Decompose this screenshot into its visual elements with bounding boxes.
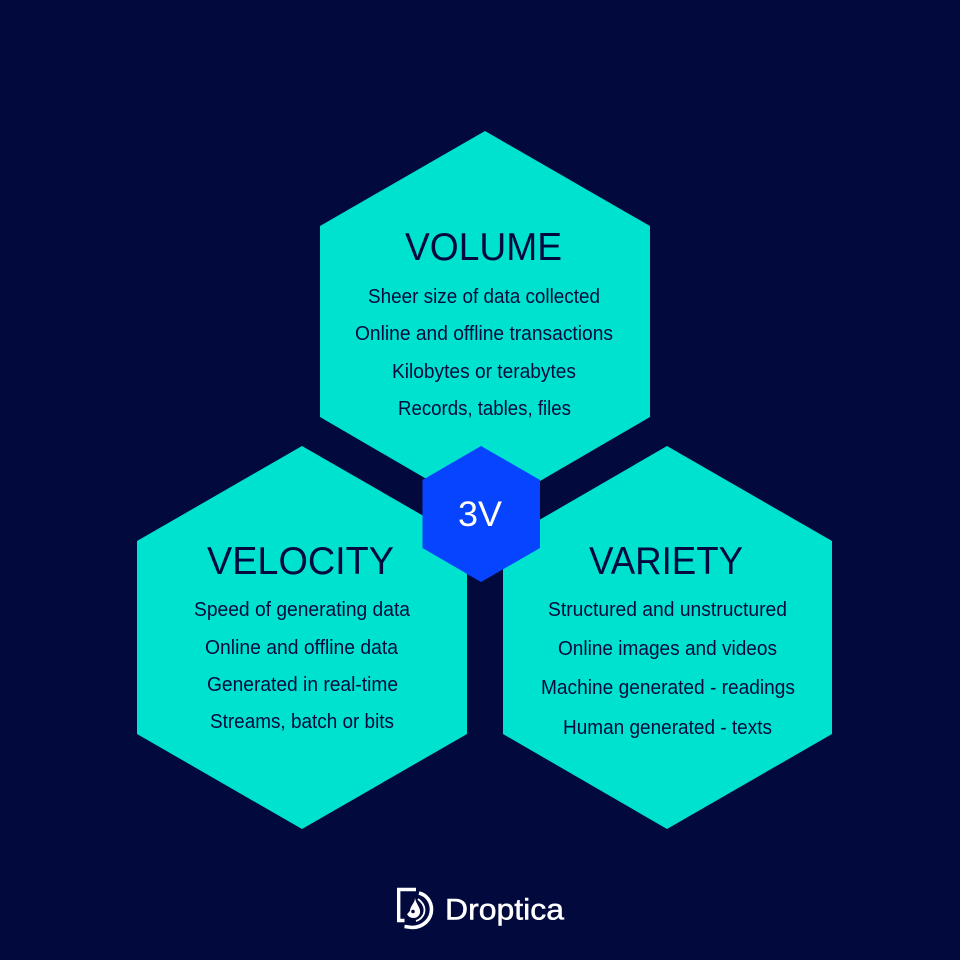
variety list: Human generated - texts [563, 717, 772, 739]
panel: variety [503, 446, 832, 829]
variety list: Machine generated - readings [541, 677, 795, 699]
heading: variety: VARIETY [589, 540, 743, 583]
velocity list: Online and offline data [205, 637, 399, 659]
velocity list: Speed of generating data [194, 599, 411, 621]
volume list: Online and offline transactions [355, 323, 613, 345]
velocity list [194, 599, 411, 733]
volume list: Records, tables, files [398, 398, 571, 420]
volume list [355, 286, 613, 420]
velocity list: Generated in real-time [207, 674, 398, 696]
variety list: Structured and unstructured [548, 599, 787, 621]
variety list [541, 599, 795, 739]
heading: volume: VOLUME [405, 226, 562, 269]
volume list: Kilobytes or terabytes [392, 361, 576, 383]
wordmark: Droptica [445, 894, 564, 926]
logo: Droptica [399, 890, 564, 928]
icon: droptica mark [399, 890, 432, 928]
panel: volume [320, 131, 650, 513]
velocity list: Streams, batch or bits [210, 711, 394, 733]
panel: velocity [137, 446, 467, 829]
center badge: 3V [422, 446, 540, 582]
variety list: Online images and videos [558, 638, 777, 660]
badge label: 3V [458, 495, 503, 534]
heading: velocity: VELOCITY [207, 540, 394, 583]
volume list: Sheer size of data collected [368, 286, 600, 308]
